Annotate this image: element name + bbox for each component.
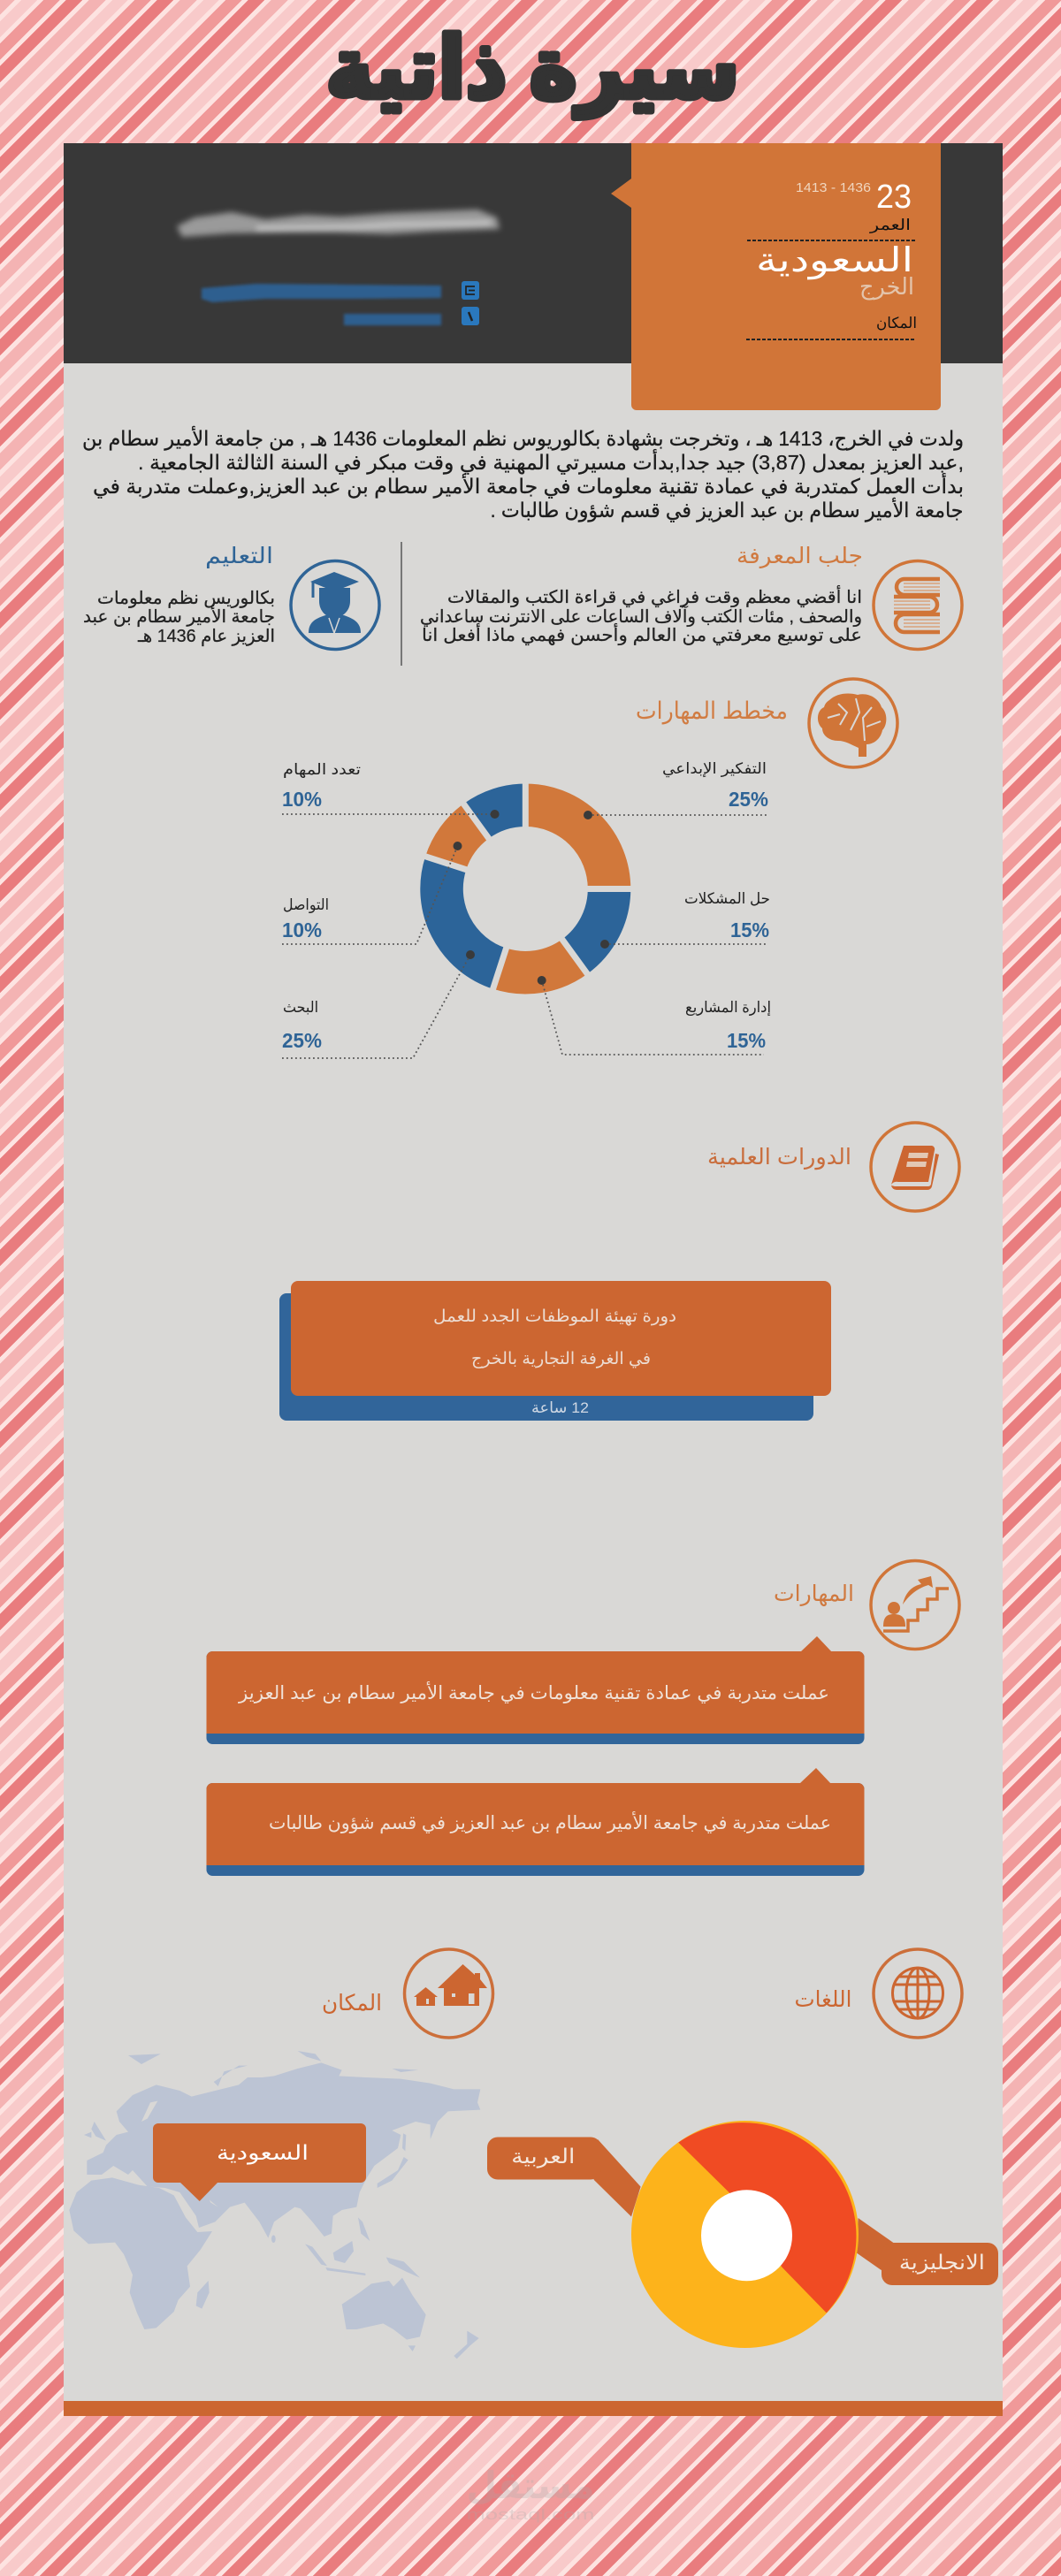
language donut (631, 2121, 859, 2348)
world map (69, 2051, 480, 2359)
labels: التفكير الإبداعي (662, 760, 767, 778)
age value: 23 (876, 179, 912, 216)
donut chart (420, 778, 636, 994)
percentages: 10% (282, 788, 322, 811)
course card: 12 ساعة (531, 1399, 589, 1416)
skill card 2 (207, 1768, 865, 1876)
section: knowledge (420, 544, 962, 649)
skill card 1 (207, 1636, 865, 1744)
section: education (83, 544, 379, 649)
watermark (467, 2465, 594, 2523)
redacted phone smudge (344, 314, 441, 325)
heading: التعليم (205, 544, 273, 569)
language tag: arabic (487, 2138, 601, 2180)
body text (420, 585, 862, 646)
percentages: 25% (282, 1029, 322, 1052)
labels: البحث (283, 999, 318, 1016)
city: الخرج (859, 273, 914, 301)
percentages: 10% (282, 918, 322, 941)
language tag: english (882, 2243, 998, 2285)
footer bar (64, 2401, 1003, 2416)
language connector: arabic (594, 2139, 641, 2217)
panel: main body (64, 143, 1003, 2401)
course card: دورة تهيئة الموظفات الجدد للعمل (433, 1307, 676, 1326)
labels: حل المشكلات (684, 890, 770, 907)
labels: تعدد المهام (283, 761, 361, 779)
heading: اللغات (794, 1987, 852, 2012)
course card (279, 1281, 831, 1421)
leader lines (282, 814, 767, 1058)
country: السعودية (756, 242, 913, 280)
icon: brain (809, 679, 897, 767)
skill card 1: عملت متدربة في عمادة تقنية معلومات في جامعة الأمير سطام بن عبد العزيز (238, 1681, 829, 1703)
icon: book (871, 1123, 959, 1211)
callout: Saudi Arabia (153, 2123, 366, 2201)
labels (283, 760, 771, 1017)
watermark: mostaql.com (467, 2506, 594, 2523)
course card: في الغرفة التجارية بالخرج (471, 1350, 651, 1368)
body text: العزيز عام 1436 هـ (137, 627, 275, 646)
icon: books (874, 560, 962, 649)
body text: بكالوريس نظم معلومات (97, 589, 275, 608)
body text (83, 589, 275, 646)
age label: العمر (869, 217, 911, 233)
leader dots (453, 810, 609, 985)
section: languages (487, 1949, 998, 2348)
percentages: 15% (727, 1029, 766, 1052)
language tag: arabic: العربية (511, 2145, 575, 2168)
heading: المكان (322, 1991, 382, 2016)
body text: انا أقضي معظم وقت فراغي في قراءة الكتب والمقالات (447, 585, 862, 608)
panel: personal info card (611, 143, 941, 410)
heading: مخطط المهارات (636, 697, 788, 725)
heading: الدورات العلمية (707, 1145, 851, 1170)
icon: graduate (291, 560, 379, 649)
body text: على توسيع معرفتي من العالم وأحسن فهمي ماذا أفعل انا (422, 623, 862, 646)
percentages (282, 788, 769, 1052)
place label: المكان (876, 315, 917, 332)
redacted email smudge (202, 284, 441, 302)
text block: biography: بدأت العمل كمتدربة في عمادة تقنية معلومات في جامعة الأمير سطام بن عبد العزيز,وعملت متدربة في (93, 473, 964, 499)
skill card 2: عملت متدربة في جامعة الأمير سطام بن عبد العزيز في قسم شؤون طالبات (269, 1811, 831, 1834)
icon: phone (462, 307, 479, 325)
percentages: 25% (729, 788, 768, 811)
panel: dark header (64, 143, 1003, 363)
language tag: english: الانجليزية (899, 2251, 985, 2275)
section: skills (207, 1561, 959, 1876)
text block: biography: ,عبد العزيز بمعدل (3,87) جيد جدا,بدأت مسيرتي المهنية في وقت مبكر في السنة الثالثة الجامعية . (138, 449, 964, 475)
title: سيرة ذاتية (325, 21, 739, 118)
callout: Saudi Arabia: السعودية (217, 2141, 309, 2165)
text block: biography (82, 426, 964, 522)
section: courses (279, 1123, 959, 1421)
icon: globe (874, 1949, 962, 2038)
icon: stairs (871, 1561, 959, 1650)
percentages: 15% (730, 918, 769, 941)
language connector: english (857, 2218, 893, 2270)
body text: والصحف , مئات الكتب وآلاف الساعات على الانترنت ساعداني (420, 605, 862, 628)
years range: 1413 - 1436 (796, 180, 871, 195)
redacted name smudge (177, 210, 500, 237)
icon: houses (405, 1949, 493, 2038)
icon: email (462, 281, 479, 300)
labels: التواصل (283, 896, 329, 913)
heading: المهارات (774, 1581, 854, 1607)
watermark: مستقل (467, 2465, 594, 2506)
labels: إدارة المشاريع (685, 999, 771, 1017)
text block: biography: جامعة الأمير سطام بن عبد العزيز في قسم شؤون طالبات . (490, 498, 964, 522)
section: skills chart (282, 679, 897, 1058)
heading: جلب المعرفة (737, 544, 863, 568)
section: location (69, 1949, 493, 2359)
body text: جامعة الأمير سطام بن عبد (83, 606, 275, 627)
text block: biography: ولدت في الخرج، 1413 هـ ، وتخرجت بشهادة بكالوريوس نظم المعلومات 1436 هـ , من جامعة الأمير سطام بن (82, 426, 964, 451)
